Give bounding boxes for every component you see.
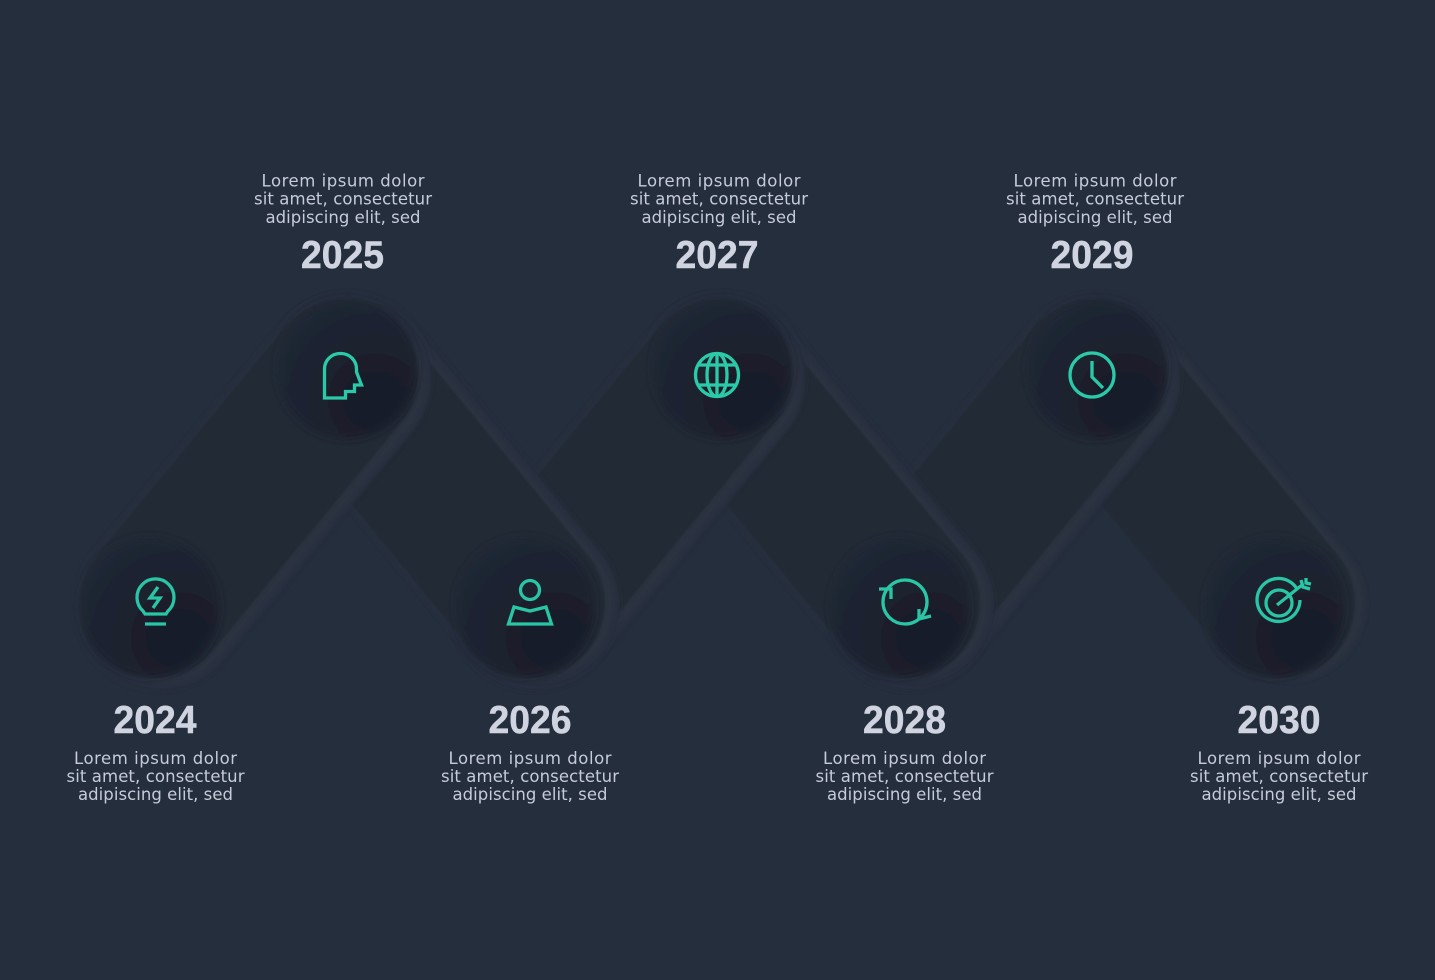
zigzag capsule track (155, 375, 1289, 609)
description 2028: adipiscing elit, sed (827, 785, 982, 804)
description 2025: Lorem ipsum dolor (262, 172, 425, 190)
description 2030: adipiscing elit, sed (1202, 785, 1356, 804)
year 2026: 2026 (488, 699, 572, 742)
step 2029 (1006, 172, 1184, 277)
description 2026 (441, 749, 619, 804)
step 2026 (441, 699, 619, 804)
description 2027 (630, 172, 808, 227)
description 2026: sit amet, consectetur (441, 767, 619, 786)
description 2024 (66, 749, 245, 804)
description 2029: sit amet, consectetur (1006, 190, 1184, 208)
capsule: 2026 to 2027 (530, 375, 725, 609)
description 2028: Lorem ipsum dolor (823, 749, 986, 768)
year 2027: 2027 (676, 234, 758, 277)
year 2030: 2030 (1238, 699, 1320, 742)
step 2027 (630, 172, 808, 277)
capsule: 2029 to 2030 (1092, 375, 1289, 604)
description 2024: Lorem ipsum dolor (74, 749, 237, 768)
icon: light bulb (137, 579, 174, 624)
icon: refresh arrows (879, 580, 931, 624)
description 2027: sit amet, consectetur (630, 190, 808, 208)
description 2026: Lorem ipsum dolor (448, 749, 612, 768)
description 2028 (816, 749, 994, 804)
capsule: 2028 to 2029 (905, 375, 1100, 609)
year 2028: 2028 (863, 699, 946, 742)
description 2024: adipiscing elit, sed (78, 785, 233, 804)
step 2025 (254, 172, 432, 277)
icon: person on map (508, 580, 552, 624)
icon: clock (1070, 353, 1114, 397)
description 2025 (254, 172, 432, 227)
dark recessed circles (80, 299, 1345, 677)
capsule: 2027 to 2028 (717, 375, 914, 604)
description 2028: sit amet, consectetur (816, 767, 994, 786)
icon: globe (696, 354, 738, 396)
description 2025: sit amet, consectetur (254, 190, 432, 208)
description 2030: sit amet, consectetur (1190, 767, 1368, 786)
description 2030 (1190, 749, 1368, 804)
description 2027: adipiscing elit, sed (642, 208, 796, 227)
step 2024 (66, 699, 245, 804)
description 2027: Lorem ipsum dolor (638, 172, 801, 190)
description 2030: Lorem ipsum dolor (1198, 749, 1361, 768)
step 2030 (1190, 699, 1368, 804)
capsule: 2025 to 2026 (343, 375, 539, 604)
description 2029: Lorem ipsum dolor (1014, 172, 1177, 190)
year 2025: 2025 (301, 234, 384, 277)
year 2024: 2024 (114, 699, 197, 742)
capsule: 2024 to 2025 (155, 375, 351, 609)
description 2025: adipiscing elit, sed (266, 208, 420, 227)
icon: target with arrow (1257, 578, 1311, 621)
description 2029 (1006, 172, 1184, 227)
description 2026: adipiscing elit, sed (452, 785, 608, 804)
step 2028 (816, 699, 994, 804)
year 2029: 2029 (1050, 234, 1134, 277)
description 2024: sit amet, consectetur (66, 767, 245, 786)
icon: head profile (324, 354, 362, 398)
description 2029: adipiscing elit, sed (1018, 208, 1172, 227)
